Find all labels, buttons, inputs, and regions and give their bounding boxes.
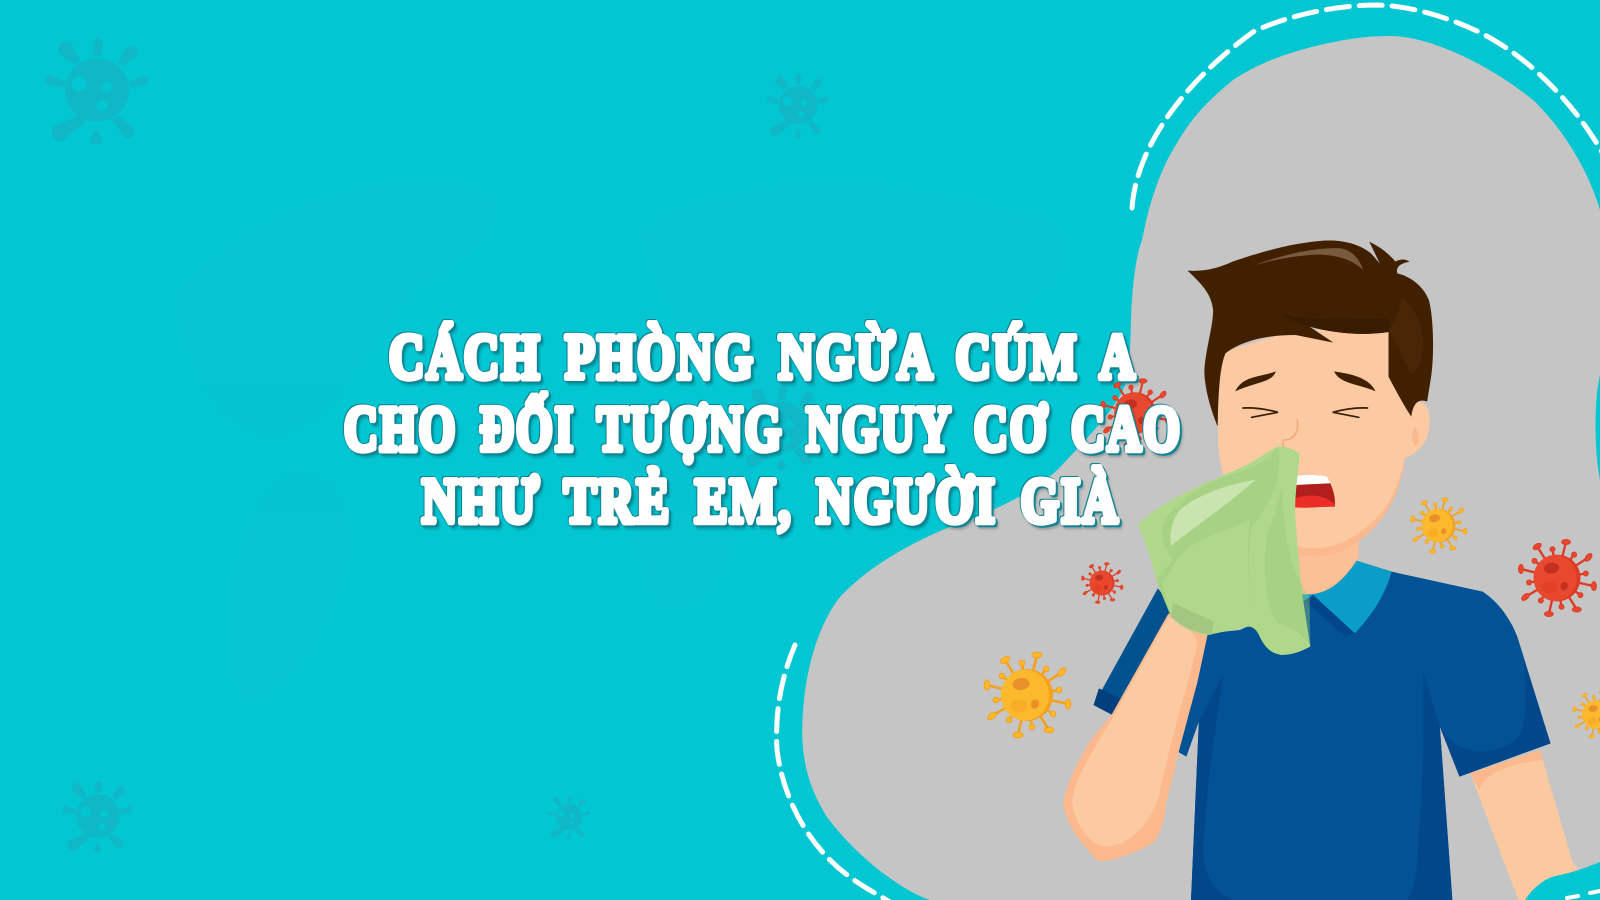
towel folds: [1158, 447, 1310, 647]
virus: red behind title: [1101, 379, 1170, 447]
title line 2: CHO ĐỐI TƯỢNG NGUY CƠ CAO: [344, 393, 1182, 464]
virus: yellow right of face: [1411, 498, 1467, 553]
watermark virus: bottom left: [63, 781, 133, 853]
right edge teal sliver: [1596, 375, 1600, 480]
shirt: [1175, 560, 1551, 900]
towel: [1138, 447, 1310, 655]
collar: [1290, 560, 1392, 633]
grey blob backdrop: [802, 36, 1600, 900]
right arm: [1470, 750, 1597, 900]
left sleeve: [1094, 588, 1176, 715]
towel highlight: [1170, 480, 1255, 546]
left arm: [1063, 613, 1208, 862]
virus: yellow at right edge: [1573, 691, 1600, 738]
mouth: [1295, 475, 1335, 508]
dashed outline: bottom arc: [777, 645, 890, 900]
hair highlight: [1255, 248, 1363, 270]
neck: [1290, 560, 1357, 594]
bottom right teal badge: [1525, 862, 1600, 900]
ear: [1403, 402, 1430, 458]
faint world map texture: [170, 182, 1069, 703]
head: [1138, 240, 1433, 655]
shirt shading: [1191, 660, 1551, 900]
virus: small red: [1081, 562, 1123, 604]
hair: [1188, 240, 1433, 427]
man illustration: [1063, 240, 1597, 900]
virus: large yellow: [984, 652, 1071, 738]
title line 3: NHƯ TRẺ EM, NGƯỜI GIÀ: [422, 465, 1120, 536]
watermark virus: behind title: [741, 386, 823, 470]
dashed outline: top arc: [1132, 5, 1600, 208]
closed eyes: [1243, 408, 1367, 417]
eyebrows: [1235, 371, 1376, 391]
white dashes on badge: [1567, 891, 1600, 898]
face: [1218, 330, 1411, 557]
watermark virus: bottom centre: [547, 795, 590, 840]
watermark virus: top centre: [767, 74, 829, 138]
watermark virus: top left: [45, 38, 148, 145]
virus: red right: [1518, 539, 1596, 617]
body and arms: [1063, 560, 1597, 900]
title: [344, 321, 1182, 536]
lower neck shade: [1297, 540, 1359, 594]
title line 1: CÁCH PHÒNG NGỪA CÚM A: [389, 321, 1137, 392]
hair shade: [1389, 298, 1424, 373]
thumb over towel: [1171, 603, 1214, 635]
nose: [1283, 420, 1298, 450]
